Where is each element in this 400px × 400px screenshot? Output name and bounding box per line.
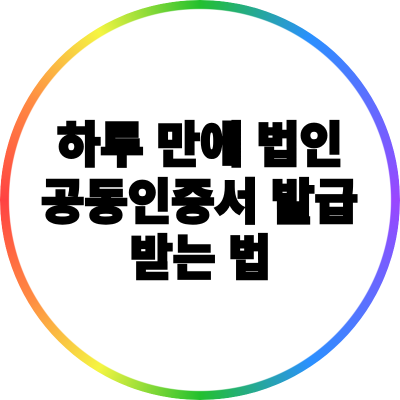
title line 1: 하루 만에 법인: [57, 120, 343, 172]
title line 3: 받는 법: [130, 232, 271, 286]
title line 2: 공동인증서 발급: [41, 176, 358, 230]
